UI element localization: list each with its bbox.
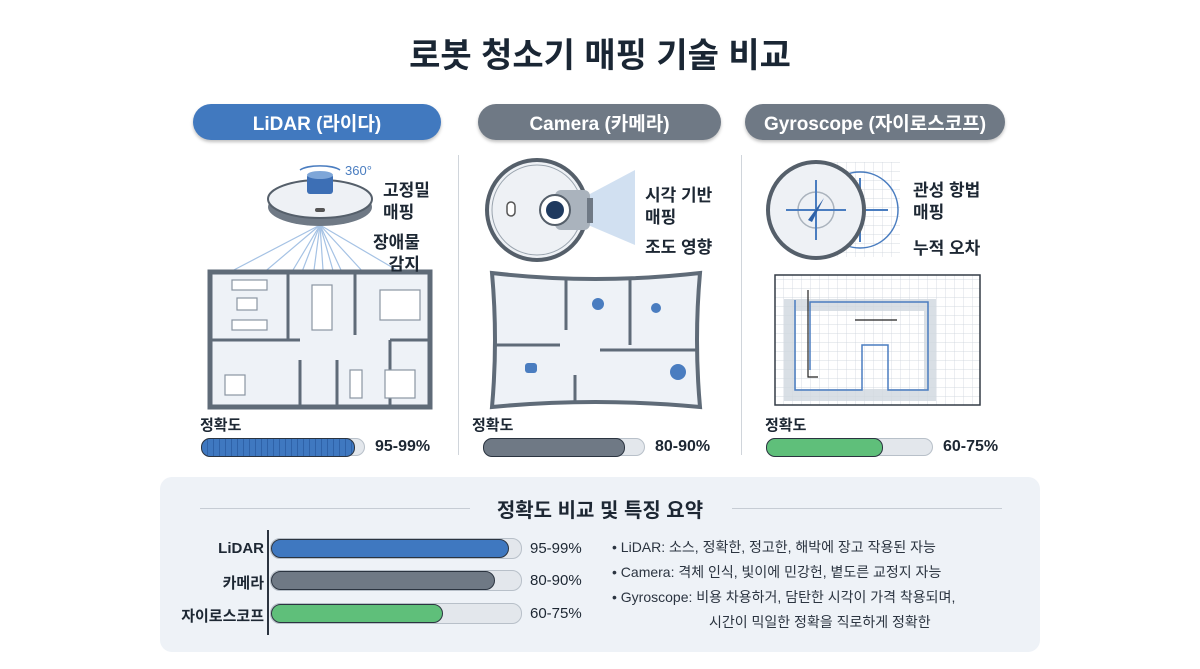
chart: accuracy bars: 카메라 xyxy=(223,575,264,592)
text: feature bullets xyxy=(612,539,955,630)
text: 고정밀 매핑: 매핑 xyxy=(383,203,414,222)
text: 시각 기반 매핑 xyxy=(645,186,712,227)
text: feature bullets: • Camera: 격체 인식, 빛이에 민강헌, 볕도른 교정지 자능 xyxy=(612,564,941,580)
panel: LiDAR xyxy=(200,163,432,457)
chart: accuracy bars: 60-75% xyxy=(530,605,582,622)
icon: lidar robot and floor plan xyxy=(208,163,432,410)
pill: Camera: Camera (카메라) xyxy=(529,114,670,134)
text: 관성 항법 매핑: 관성 항법 xyxy=(913,181,980,200)
title: 로봇 청소기 매핑 기술 비교 xyxy=(409,37,791,75)
panel: summary xyxy=(160,477,1040,652)
text: feature bullets: • LiDAR: 소스, 정확한, 정고한, 해박에 장고 작용된 자능 xyxy=(612,539,936,555)
text: 시각 기반 매핑: 매핑 xyxy=(645,208,676,227)
icon: camera robot and floor plan xyxy=(485,158,702,410)
label: 정확도: 정확도 xyxy=(200,417,241,434)
text: 고정밀 매핑 xyxy=(383,181,430,222)
summary heading: 정확도 비교 및 특징 요약 xyxy=(497,500,703,522)
chart: accuracy bars xyxy=(181,538,582,625)
panel: Camera xyxy=(472,158,712,457)
icon: gyroscope compass and path grid xyxy=(766,160,981,406)
value: 80-90% xyxy=(655,438,710,455)
bar: Gyroscope accuracy xyxy=(766,438,933,456)
label: 정확도: 정확도 xyxy=(472,417,513,434)
chart: accuracy bars: LiDAR xyxy=(218,540,264,557)
value: 95-99% xyxy=(375,438,430,455)
panel: Gyroscope xyxy=(765,160,998,457)
text: 장애물 감지: 장애물 xyxy=(373,233,420,252)
label: 정확도: 정확도 xyxy=(765,417,806,434)
text: 관성 항법 매핑 xyxy=(913,181,980,222)
text: 고정밀 매핑: 고정밀 xyxy=(383,181,430,200)
pill: Camera xyxy=(478,104,721,140)
icon: lidar robot and floor plan: 360° xyxy=(345,163,372,178)
chart: accuracy bars: 80-90% xyxy=(530,572,582,589)
text: 관성 항법 매핑: 매핑 xyxy=(913,203,944,222)
text: 장애물 감지 xyxy=(373,233,420,274)
text: feature bullets: 시간이 믹일한 정확을 직로하게 정확한 xyxy=(709,614,931,630)
text: 조도 영향: 조도 영향 xyxy=(645,238,712,257)
text: 시각 기반 매핑: 시각 기반 xyxy=(645,186,712,205)
chart: accuracy bars: 자이로스코프 xyxy=(181,608,264,625)
pill: LiDAR: LiDAR (라이다) xyxy=(253,114,381,134)
pill: Gyroscope: Gyroscope (자이로스코프) xyxy=(764,114,986,134)
bar: Camera accuracy xyxy=(483,438,645,456)
text: 장애물 감지: 감지 xyxy=(389,255,420,274)
text: 누적 오차: 누적 오차 xyxy=(913,239,980,258)
bar: LiDAR accuracy xyxy=(201,438,365,456)
chart: accuracy bars: 95-99% xyxy=(530,540,582,557)
pill: Gyroscope xyxy=(745,104,1005,140)
value: 60-75% xyxy=(943,438,998,455)
pill: LiDAR xyxy=(193,104,441,140)
text: feature bullets: • Gyroscope: 비용 차용하거, 담탄한 시각이 가격 착용되며, xyxy=(612,589,955,605)
